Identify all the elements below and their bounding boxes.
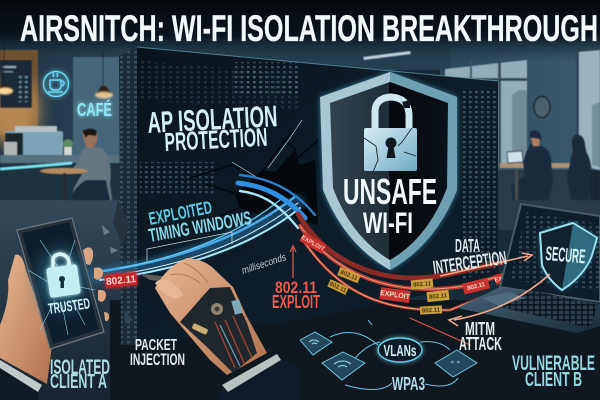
AP isolation heading: AP ISOLATION (147, 100, 278, 140)
data interception label (432, 236, 508, 279)
office windows (445, 60, 527, 170)
phone screen glow (36, 248, 88, 312)
circuit section (180, 287, 257, 373)
shield text (343, 171, 437, 240)
laptop base (457, 287, 600, 333)
AP isolation heading (147, 100, 278, 157)
ceiling light (363, 51, 411, 60)
shield text: UNSAFE (343, 171, 437, 212)
red tag: EXPLOIT (494, 272, 521, 284)
packet injection label: INJECTION (130, 350, 185, 369)
802.11 exploit label: 802.11 (275, 278, 317, 297)
yellow tag (337, 267, 361, 283)
icon: switch right (435, 350, 477, 377)
mitm attack label: ATTACK (459, 334, 502, 354)
red tag: 802.11 (467, 282, 486, 292)
timing windows callout (147, 197, 253, 262)
shield glow (320, 72, 457, 270)
hand shape (155, 258, 267, 375)
wall crack (102, 120, 318, 324)
panel: AP isolation wall (119, 47, 498, 345)
red tag (379, 287, 411, 303)
laptop: client B (457, 204, 600, 333)
802.11 exploit label: EXPLOIT (272, 292, 320, 312)
packet tags (299, 232, 521, 315)
warm cafe wall light (0, 74, 40, 146)
shield body (320, 72, 457, 270)
laptop screen (500, 204, 600, 302)
data interception label: DATA (455, 236, 480, 256)
person at table (70, 146, 112, 200)
icon: router left (300, 332, 332, 355)
client B label (512, 352, 595, 391)
AP isolation heading: PROTECTION (164, 122, 268, 157)
icon: phone padlock (46, 254, 81, 298)
arrows to laptop (440, 253, 550, 326)
wall front face (137, 47, 498, 345)
cafe window (73, 57, 120, 157)
sleeve (0, 366, 38, 400)
hand (0, 255, 52, 384)
mitm attack label (459, 319, 502, 354)
coffee machine (5, 131, 63, 156)
yellow tag: 802.11 (339, 270, 359, 282)
wall shards (113, 200, 130, 245)
menu board (0, 60, 32, 108)
client A label (50, 356, 110, 393)
cafe table (40, 168, 88, 174)
timing windows callout: TIMING WINDOWS (147, 208, 253, 247)
icon: broken padlock (364, 92, 417, 172)
packet injection label: PACKET (135, 337, 177, 354)
sleeve (216, 355, 300, 400)
stylus (140, 274, 183, 284)
phone (17, 218, 104, 349)
yellow tag: 802.11 (328, 281, 348, 295)
milliseconds label: milliseconds (241, 252, 288, 277)
client A hand and phone (0, 218, 109, 400)
yellow tag: 802.11 (413, 281, 432, 289)
pendant lamps (0, 84, 112, 94)
WPA3 label: WPA3 (392, 374, 425, 394)
yellow tag (420, 305, 442, 315)
arrow: exploit marker (290, 246, 296, 278)
yellow tag (411, 279, 433, 289)
icon: router center (322, 352, 365, 380)
timing windows callout: EXPLOITED (147, 197, 214, 229)
802.11 exploit label (272, 278, 320, 312)
data interception label: INTERCEPTION (432, 248, 508, 279)
wood wall frame (0, 50, 38, 135)
yellow tag: 802.11 (429, 293, 448, 301)
desk and workers (500, 163, 590, 168)
cybernetic hand (140, 258, 300, 400)
client A label: ISOLATED (50, 356, 110, 379)
red stream (298, 214, 545, 345)
fingers (83, 247, 109, 321)
shield text: WI-FI (363, 207, 413, 240)
icon: coffee neon sign (44, 72, 68, 96)
VLANs node (378, 338, 422, 362)
wall left face (119, 47, 137, 345)
phone cracks (28, 240, 95, 335)
shield: unsafe wi-fi (320, 72, 457, 270)
VLANs node: VLANs (384, 343, 417, 360)
laptop shield (540, 223, 597, 290)
red tag: EXPLOIT (380, 290, 411, 301)
cafe scene (0, 40, 122, 200)
client A label: CLIENT A (50, 371, 107, 393)
arrow: mitm attack (449, 274, 550, 326)
mitm attack label: MITM (465, 319, 495, 339)
red tag (462, 278, 490, 294)
exploit data stream (96, 175, 545, 345)
cafe label: CAFÉ (77, 99, 112, 120)
counter (0, 155, 120, 163)
trusted label: TRUSTED (47, 295, 91, 318)
blue stream (96, 175, 315, 280)
red tag: EXPLOIT (300, 235, 325, 253)
yellow tag (427, 290, 449, 302)
network links (330, 320, 458, 390)
office scene (363, 50, 600, 200)
arrow: data interception (440, 253, 532, 276)
packet injection label (130, 337, 185, 369)
802.11 packet tag: 802.11 (106, 274, 137, 288)
network diagram (300, 320, 477, 394)
wall clock (534, 96, 550, 118)
yellow tag: 802.11 (422, 307, 441, 314)
